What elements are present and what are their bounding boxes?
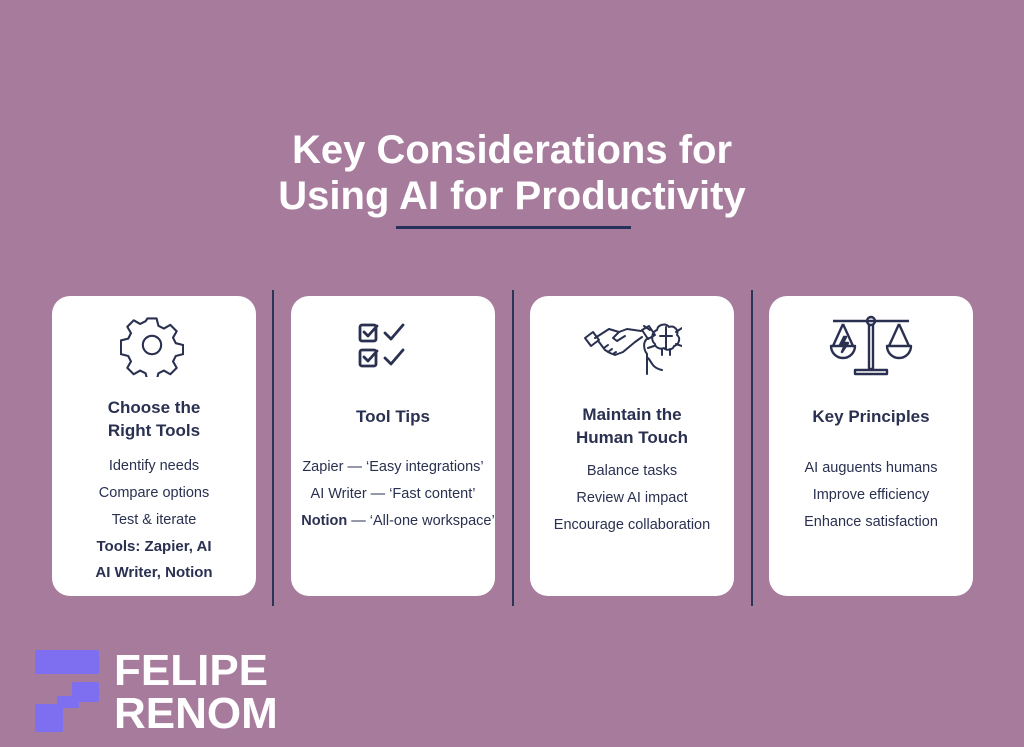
list: Test & iterate (112, 512, 196, 528)
panel: tool tips (291, 296, 495, 596)
logo (35, 646, 278, 738)
heading: Choose the (108, 398, 200, 417)
tools note (95, 538, 213, 581)
logo text: FELIPE (114, 646, 268, 695)
icon: gear (120, 317, 184, 377)
list: Identify needs (109, 458, 199, 474)
title: Using AI for Productivity (278, 174, 746, 218)
tools note: AI Writer, Notion (95, 564, 213, 581)
heading: Right Tools (108, 421, 200, 440)
heading: Maintain the (582, 405, 682, 424)
list (99, 458, 209, 528)
list: Compare options (99, 485, 209, 501)
heading: Key Principles (812, 407, 930, 426)
title (278, 128, 746, 218)
heading: Tool Tips (356, 407, 430, 426)
tools note: Tools: Zapier, AI (96, 538, 212, 555)
list: Notion — ‘All-one workspace’ (301, 513, 495, 529)
title: Key Considerations for (292, 128, 732, 172)
heading (108, 398, 200, 440)
list (804, 460, 938, 530)
panel: key principles (769, 296, 973, 596)
logo text: RENOM (114, 689, 278, 738)
title underline (396, 226, 631, 229)
heading (576, 405, 688, 447)
list: Improve efficiency (813, 487, 929, 503)
list: AI auguents humans (804, 460, 938, 476)
logo mark (35, 650, 99, 732)
list (554, 463, 710, 533)
list: Zapier — ‘Easy integrations’ (302, 459, 484, 475)
list: Enhance satisfaction (804, 514, 938, 530)
icon: balance scale (830, 316, 912, 376)
list: Encourage collaboration (554, 517, 710, 533)
heading: Human Touch (576, 428, 688, 447)
list (301, 459, 495, 529)
list: Review AI impact (576, 490, 688, 506)
icon: checklist (358, 324, 404, 368)
icon: handshake and brain (584, 324, 682, 375)
list: Balance tasks (587, 463, 677, 479)
list: AI Writer — ‘Fast content’ (311, 486, 475, 502)
panel: choose the right tools (52, 296, 256, 596)
logo text (114, 646, 278, 738)
panel: maintain the human touch (530, 296, 734, 596)
